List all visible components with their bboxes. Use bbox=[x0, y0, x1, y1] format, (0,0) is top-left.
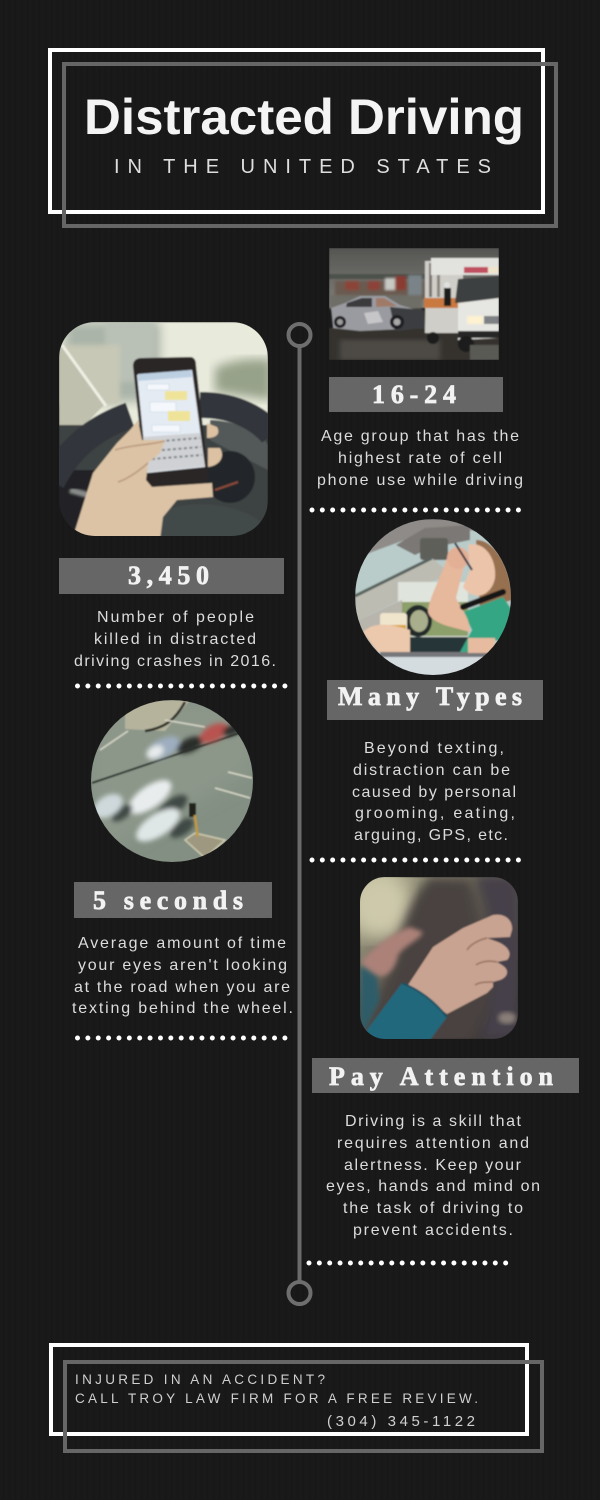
photo: hands on steering wheel bbox=[360, 877, 518, 1039]
text: types of distraction: caused by personal bbox=[352, 784, 516, 801]
stat bar: Pay Attention: Pay Attention bbox=[329, 1062, 554, 1091]
stat bar: 16-24: 16-24 bbox=[372, 380, 456, 409]
text: eyes off road: your eyes aren't looking bbox=[78, 957, 287, 974]
heading: Distracted Driving bbox=[84, 89, 524, 145]
text: eyes off road bbox=[72, 935, 293, 1017]
text: advice: eyes, hands and mind on bbox=[326, 1178, 540, 1195]
text: types of distraction: grooming, eating, bbox=[355, 805, 515, 822]
timeline bbox=[288, 324, 310, 1304]
stat bar: 16-24 bbox=[329, 377, 503, 412]
text: people killed: driving crashes in 2016. bbox=[74, 653, 276, 670]
text: advice bbox=[326, 1113, 540, 1239]
dotted divider bbox=[78, 1036, 285, 1040]
text: eyes off road: at the road when you are bbox=[74, 979, 290, 996]
text: types of distraction: Beyond texting, bbox=[364, 740, 504, 757]
title block bbox=[50, 50, 556, 226]
photo: crash and ambulance bbox=[329, 248, 499, 360]
stat bar: Many Types: Many Types bbox=[338, 682, 522, 711]
dotted divider bbox=[312, 858, 518, 862]
text: age group: Age group that has the bbox=[321, 428, 519, 445]
stat bar: 3,450 bbox=[59, 558, 284, 594]
dotted divider bbox=[309, 1260, 516, 1266]
text: advice: requires attention and bbox=[337, 1135, 529, 1152]
subheading: IN THE UNITED STATES bbox=[114, 156, 491, 178]
dotted divider bbox=[78, 684, 285, 688]
text: advice: the task of driving to bbox=[343, 1200, 523, 1217]
text: advice: prevent accidents. bbox=[353, 1222, 513, 1239]
photo: woman multitasking in car bbox=[355, 519, 515, 677]
stat bar: Pay Attention bbox=[312, 1058, 579, 1093]
text: people killed: Number of people bbox=[97, 609, 254, 626]
footer callout bbox=[51, 1345, 542, 1451]
photo: texting at the wheel bbox=[52, 322, 272, 540]
text: advice: alertness. Keep your bbox=[344, 1157, 522, 1174]
text: eyes off road: texting behind the wheel. bbox=[72, 1000, 293, 1017]
stat bar: 5 seconds: 5 seconds bbox=[93, 886, 243, 915]
text: types of distraction bbox=[352, 740, 516, 844]
text: people killed: killed in distracted bbox=[94, 631, 256, 648]
footer callout: CALL TROY LAW FIRM FOR A FREE REVIEW. bbox=[75, 1391, 478, 1406]
text: age group bbox=[317, 428, 523, 489]
text: eyes off road: Average amount of time bbox=[78, 935, 286, 952]
text: types of distraction: distraction can be bbox=[353, 762, 510, 779]
dotted divider bbox=[312, 508, 518, 512]
title frame: gray offset bbox=[64, 64, 556, 226]
footer frame: gray offset bbox=[65, 1362, 542, 1451]
title frame: white bbox=[50, 50, 543, 212]
stat bar: 3,450: 3,450 bbox=[128, 561, 209, 590]
photo: blurred traffic bbox=[89, 700, 254, 864]
text: people killed bbox=[74, 609, 276, 670]
stat bar: Many Types bbox=[327, 680, 543, 720]
text: age group: phone use while driving bbox=[317, 472, 523, 489]
footer text: INJURED IN AN ACCIDENT? bbox=[75, 1372, 325, 1387]
text: types of distraction: arguing, GPS, etc. bbox=[354, 827, 508, 844]
text: age group: highest rate of cell bbox=[338, 450, 502, 467]
footer callout: (304) 345-1122 bbox=[327, 1413, 475, 1430]
footer frame: white bbox=[51, 1345, 527, 1434]
stat bar: 5 seconds bbox=[74, 882, 272, 918]
text: advice: Driving is a skill that bbox=[345, 1113, 522, 1130]
